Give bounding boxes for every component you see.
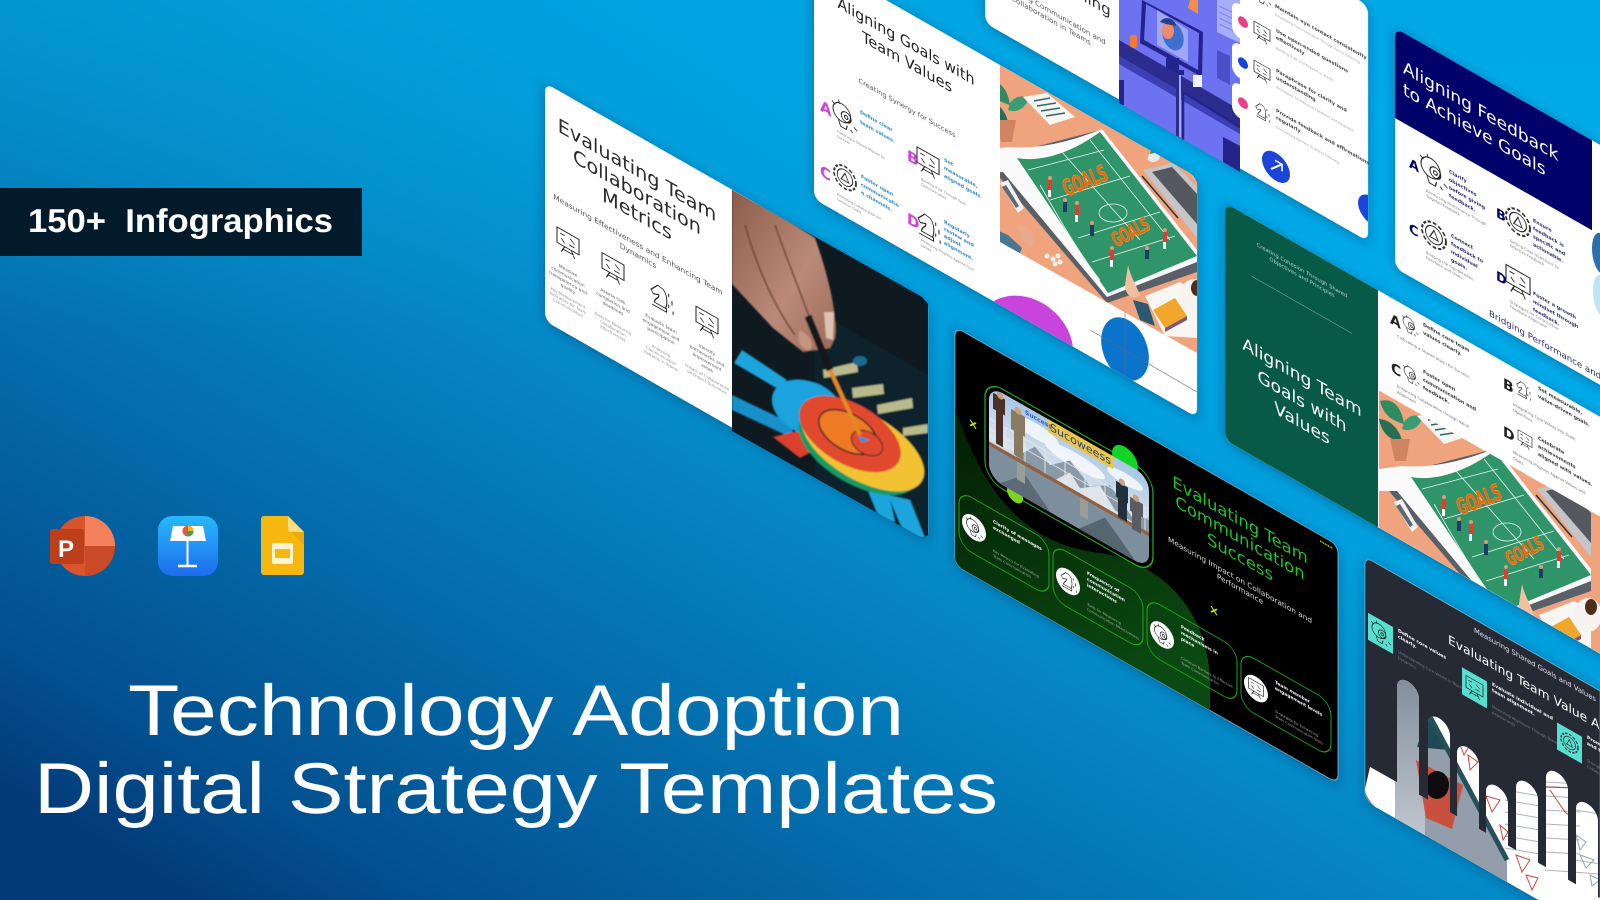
illustration: goals board on desk	[1000, 65, 1197, 353]
subtitle: Objectives and Principles	[1269, 256, 1335, 300]
item 2: Evaluate individual and	[1492, 681, 1553, 722]
list item: open questions: Building Trust and Rapport in Teams	[1276, 46, 1334, 83]
column 4: Identify	[699, 343, 716, 358]
item 3	[1557, 717, 1600, 797]
slide card: evaluating team communication success	[955, 327, 1338, 783]
item 2: Assessments	[1492, 710, 1516, 728]
column 3: participation	[647, 325, 675, 347]
photo arches	[1365, 680, 1600, 900]
column 2: deadlines	[603, 300, 624, 318]
item D: adjust	[944, 233, 962, 249]
metric card 4: Strategies for Enhancing	[1275, 709, 1318, 738]
item D: Feedback Alignment	[1510, 305, 1547, 330]
item B: B	[1503, 375, 1514, 398]
white list panel tabs	[1232, 0, 1254, 126]
blue corner circle	[1358, 194, 1368, 222]
icon: Google Slides	[261, 516, 304, 575]
item C	[820, 150, 900, 237]
item C	[1391, 351, 1477, 439]
item C: C	[1391, 360, 1401, 381]
item B: Ensure	[1533, 218, 1552, 235]
illustration: goals board on desk: GOALS	[1107, 212, 1154, 252]
icon: Keynote	[158, 516, 218, 576]
metric card 4	[1241, 651, 1331, 757]
item D: Goals	[1513, 456, 1523, 466]
item C	[1409, 209, 1484, 293]
item D: review and	[944, 226, 974, 249]
item B: specific and	[1533, 234, 1566, 258]
item A: Clarify	[1449, 169, 1467, 185]
item A: feedback.	[1449, 193, 1476, 214]
item C: Enhancing Collaboration through Value	[1397, 384, 1470, 430]
decorative leaf	[1592, 232, 1600, 315]
banner: Success	[1025, 409, 1052, 431]
item C: Connect	[1451, 233, 1474, 252]
metric card 2: interactions	[1087, 582, 1117, 605]
heading: Evaluating Team	[558, 113, 716, 227]
metric card 2	[1053, 544, 1143, 650]
column 1: communication	[551, 265, 585, 290]
slide card: aligning feedback to achieve goals	[1388, 28, 1600, 394]
item 1	[1368, 611, 1462, 697]
icon: PowerPoint: P	[58, 536, 74, 563]
heading: Communication	[1175, 492, 1305, 584]
list icons	[1254, 0, 1271, 124]
item D: D	[907, 209, 919, 234]
item C: feedback to	[1451, 241, 1484, 266]
metric card 3	[1147, 597, 1237, 704]
metric card 3: Team Communication	[1180, 660, 1219, 686]
metric card 2: communication	[1087, 576, 1125, 604]
item B: measurable,	[944, 165, 978, 190]
list item: paraphrase: Paraphrase for clarity and	[1276, 68, 1347, 115]
list item: feedback: Provide feedback and affirmations	[1276, 108, 1369, 167]
list item: open questions: effectively	[1276, 35, 1305, 58]
list markers	[1238, 14, 1248, 111]
photo: hand with pen on dart target	[732, 190, 928, 538]
heading: Evaluating Team	[1172, 472, 1308, 568]
heading: Metrics	[602, 183, 672, 245]
item D: Celebrate	[1538, 435, 1565, 457]
column 3: Evaluate team	[645, 312, 677, 336]
metric card 1: Team Communication	[992, 553, 1031, 579]
item B: B	[907, 146, 918, 171]
subtitle: Performance	[1217, 571, 1264, 607]
slide card: aligning goals with team values	[814, 0, 1225, 417]
slide card: aligning team goals with values	[1218, 202, 1600, 662]
item D: Values	[921, 243, 932, 253]
item C: Promoting Collaboration for	[837, 192, 882, 222]
arrow button	[1262, 145, 1290, 189]
subtitle: Measuring Shared Goals and Values	[1474, 626, 1596, 704]
item C: feedback.	[1423, 385, 1450, 406]
column 1	[549, 222, 587, 321]
column 3: Analyzing	[652, 343, 671, 359]
title: Digital Strategy Templates	[34, 749, 998, 829]
list item: feedback: regularly	[1276, 115, 1301, 135]
item A: Fostering a Shared Mission for	[837, 129, 886, 161]
item A	[1390, 303, 1469, 379]
metric card 2: Communication Effectiveness	[1087, 607, 1139, 641]
item A: Success	[837, 134, 850, 146]
slide card: aligning communication (top)	[985, 0, 1386, 244]
icon: PowerPoint	[50, 516, 115, 576]
item D: achievements	[1538, 443, 1576, 471]
item D: aligned with values.	[1538, 451, 1593, 489]
slide card: evaluating team collaboration metrics	[545, 83, 938, 550]
item D: feedback.	[1533, 307, 1560, 328]
list item: open questions: Use open-ended questions	[1276, 28, 1348, 75]
item C: Foster open	[861, 174, 894, 198]
item A	[820, 86, 895, 171]
item D: Measuring Progress Against Values and	[1513, 450, 1585, 495]
item B: Integrating Core Values into Team	[1513, 402, 1576, 442]
item A: Define clear	[860, 109, 893, 134]
item B	[907, 136, 982, 221]
illustration: goals board on desk: GOALS	[1501, 531, 1548, 571]
subtitle: Measuring Effectiveness and Enhancing Team	[553, 192, 723, 297]
metric card 1	[959, 490, 1049, 597]
list item: paraphrase: Techniques for Effective Feedback and Response	[1275, 84, 1354, 133]
item B: Building Trust Through Open	[921, 177, 966, 207]
item D: mindset through	[1533, 299, 1579, 331]
item C: communicatio	[861, 182, 900, 210]
item B: aligned goals.	[944, 173, 982, 201]
column 3: Communication	[646, 345, 677, 367]
item A: A	[1409, 156, 1419, 177]
item A	[1409, 144, 1486, 232]
item D	[1503, 415, 1593, 506]
item A: objectives	[1449, 177, 1477, 199]
metric card 1: Key Metrics for Evaluating	[993, 549, 1039, 579]
item B: actionable.	[1533, 242, 1563, 265]
accent circles	[1007, 380, 1138, 572]
item B: B	[1496, 206, 1506, 226]
badge: 150+ infographics	[0, 188, 362, 256]
item 2: team alignment.	[1492, 687, 1535, 718]
metric card 4: engagement levels	[1275, 685, 1322, 718]
column 2: Tools for Measuring	[594, 310, 632, 337]
list item: feedback: Overcoming Barriers to Active Listening	[1276, 125, 1339, 165]
title: Technology Adoption	[128, 671, 904, 751]
metric card 3: mechanisms in	[1181, 630, 1218, 657]
item C: goals.	[1451, 257, 1467, 272]
heading	[1242, 334, 1362, 468]
item B: Objectives	[1513, 408, 1532, 423]
item D: D	[1503, 423, 1515, 446]
item A: Reinforcing Performance Through	[1426, 189, 1486, 227]
title	[34, 671, 998, 829]
heading: Team Values	[861, 27, 952, 97]
column 2: Effectiveness	[600, 324, 626, 343]
photo: people on mountain bridge	[989, 384, 1149, 573]
item C: communication and	[1423, 377, 1477, 413]
heading: Goals with	[1257, 367, 1347, 437]
item C: Foster open	[1423, 369, 1456, 394]
metric card 2: Frequency of	[1087, 570, 1119, 595]
column 3	[643, 277, 680, 374]
item C: C	[1409, 221, 1419, 241]
metric card 1: exchanged	[993, 525, 1020, 546]
item D: D	[1496, 269, 1507, 290]
item D: Measuring Progress Against Core	[921, 238, 974, 272]
subtitle: Creating Synergy for Success	[859, 76, 956, 140]
banner: Sucoweess	[1050, 421, 1111, 468]
item A: A	[820, 96, 832, 121]
illustration: video call workspace	[1119, 0, 1240, 180]
item 2	[1462, 664, 1557, 752]
item D	[907, 198, 974, 277]
item 2: Measuring Alignment Through Team	[1492, 704, 1557, 746]
item D: Foster a growth	[1533, 291, 1577, 321]
column 1: Measure	[559, 263, 577, 280]
banner	[1025, 405, 1113, 469]
item D: alignment.	[944, 240, 973, 263]
metric card 1: Clarity of messages	[993, 519, 1042, 553]
column 2	[594, 248, 632, 347]
heading: Success	[1207, 529, 1273, 585]
metric card 2: Tools for Measuring	[1086, 602, 1121, 626]
metric card 4: Team Communication Skills	[1274, 714, 1323, 746]
column 1: Key Measurement	[551, 285, 586, 310]
item D: Strategies for Constructive	[1510, 300, 1559, 332]
item B	[1503, 365, 1590, 456]
item B: Set	[944, 157, 954, 169]
item B: Effective Feedback	[1510, 244, 1545, 267]
header band	[1395, 28, 1592, 230]
column 2: Assess task	[601, 287, 626, 307]
metric card 4: Team member	[1275, 679, 1311, 706]
item 1: clearly.	[1398, 634, 1417, 651]
heading: to Achieve Goals	[1403, 80, 1546, 181]
item D	[1496, 259, 1579, 348]
item B: Communication	[921, 182, 946, 200]
illustration: goals board on desk: GOALS	[1059, 161, 1112, 202]
item D: Regularly	[944, 219, 971, 240]
subtitle: Creating Cohesion Through Shared	[1257, 242, 1347, 300]
item C: Bridging the Gap Between	[1426, 251, 1473, 282]
metric card 3: Common Barriers to Effective	[1181, 656, 1233, 689]
column 3: Patterns in Teams	[644, 349, 678, 373]
green side panel	[1225, 203, 1378, 527]
column 4: Impact of Collaboration	[685, 362, 730, 392]
item B: feedback is	[1533, 226, 1564, 249]
heading: Values	[1274, 398, 1330, 450]
item B	[1496, 197, 1566, 279]
column 1: quality	[561, 282, 576, 297]
column 4: areas	[701, 363, 714, 375]
item C: C	[820, 161, 831, 186]
column 1: Communication	[553, 297, 584, 319]
item B: Set measurable,	[1538, 385, 1582, 417]
decorative circles	[994, 296, 1197, 392]
item C: Alignment	[1397, 390, 1416, 405]
item A: Define core team	[1423, 322, 1469, 354]
lime marks	[970, 342, 1333, 681]
item A: team values.	[860, 119, 895, 145]
item 1: Define core values	[1398, 628, 1446, 661]
item A: A	[1390, 311, 1401, 333]
metric card 3: place	[1181, 636, 1194, 649]
list item: eye contact: Maintain eye contact consistently	[1275, 3, 1367, 62]
item 1: Dynamics	[1398, 656, 1416, 670]
item 1: Understanding Core Values in Team	[1398, 650, 1462, 691]
item C: Common Goals	[837, 197, 862, 215]
slide card: evaluating team value alignment	[1365, 560, 1600, 900]
column 1: Indicators for Team	[550, 290, 587, 316]
metric card 3: Feedback	[1181, 624, 1205, 643]
item C: Feedback and Goals	[1426, 256, 1462, 280]
item C: individual	[1451, 249, 1478, 270]
column 4: bottlenecks and	[690, 344, 724, 369]
subtitle: Measuring Impact on Collaboration and	[1168, 534, 1312, 625]
column 3: engagement and	[643, 317, 680, 344]
list item: eye contact: Developing Communication Through Active Listening	[1275, 12, 1360, 65]
item B: Setting Clear Objectives for	[1510, 239, 1560, 271]
people	[993, 388, 1143, 535]
illustration: goals board on desk: GOALS	[1453, 480, 1506, 521]
heading: Collaboration	[573, 144, 701, 240]
column 1: transparency and	[549, 269, 587, 297]
item A: Cultivating a Shared Vision for Success	[1397, 334, 1469, 379]
column 2: completion and	[596, 290, 630, 315]
item A: Targeted Feedback	[1425, 193, 1461, 217]
green background blob	[955, 407, 1210, 720]
column 4: improvement	[693, 351, 722, 374]
illustration: goals board on desk	[1379, 390, 1600, 654]
badge: 150+ infographics: 150+ Infographics	[28, 202, 333, 239]
list item: paraphrase: understanding	[1276, 75, 1316, 104]
photo frame	[985, 379, 1153, 575]
subtitle: Dynamics	[620, 241, 656, 270]
column 4	[685, 300, 730, 397]
item B: value-driven goals.	[1538, 393, 1590, 429]
heading: Aligning Team	[1242, 334, 1362, 422]
column 2: Collaboration	[600, 319, 626, 338]
item A: before giving	[1449, 185, 1486, 212]
item A: values clearly.	[1423, 330, 1462, 358]
column 4: on Project Outcomes	[687, 368, 727, 396]
item C: n channels.	[861, 190, 892, 214]
heading: Aligning Feedback	[1403, 58, 1558, 166]
